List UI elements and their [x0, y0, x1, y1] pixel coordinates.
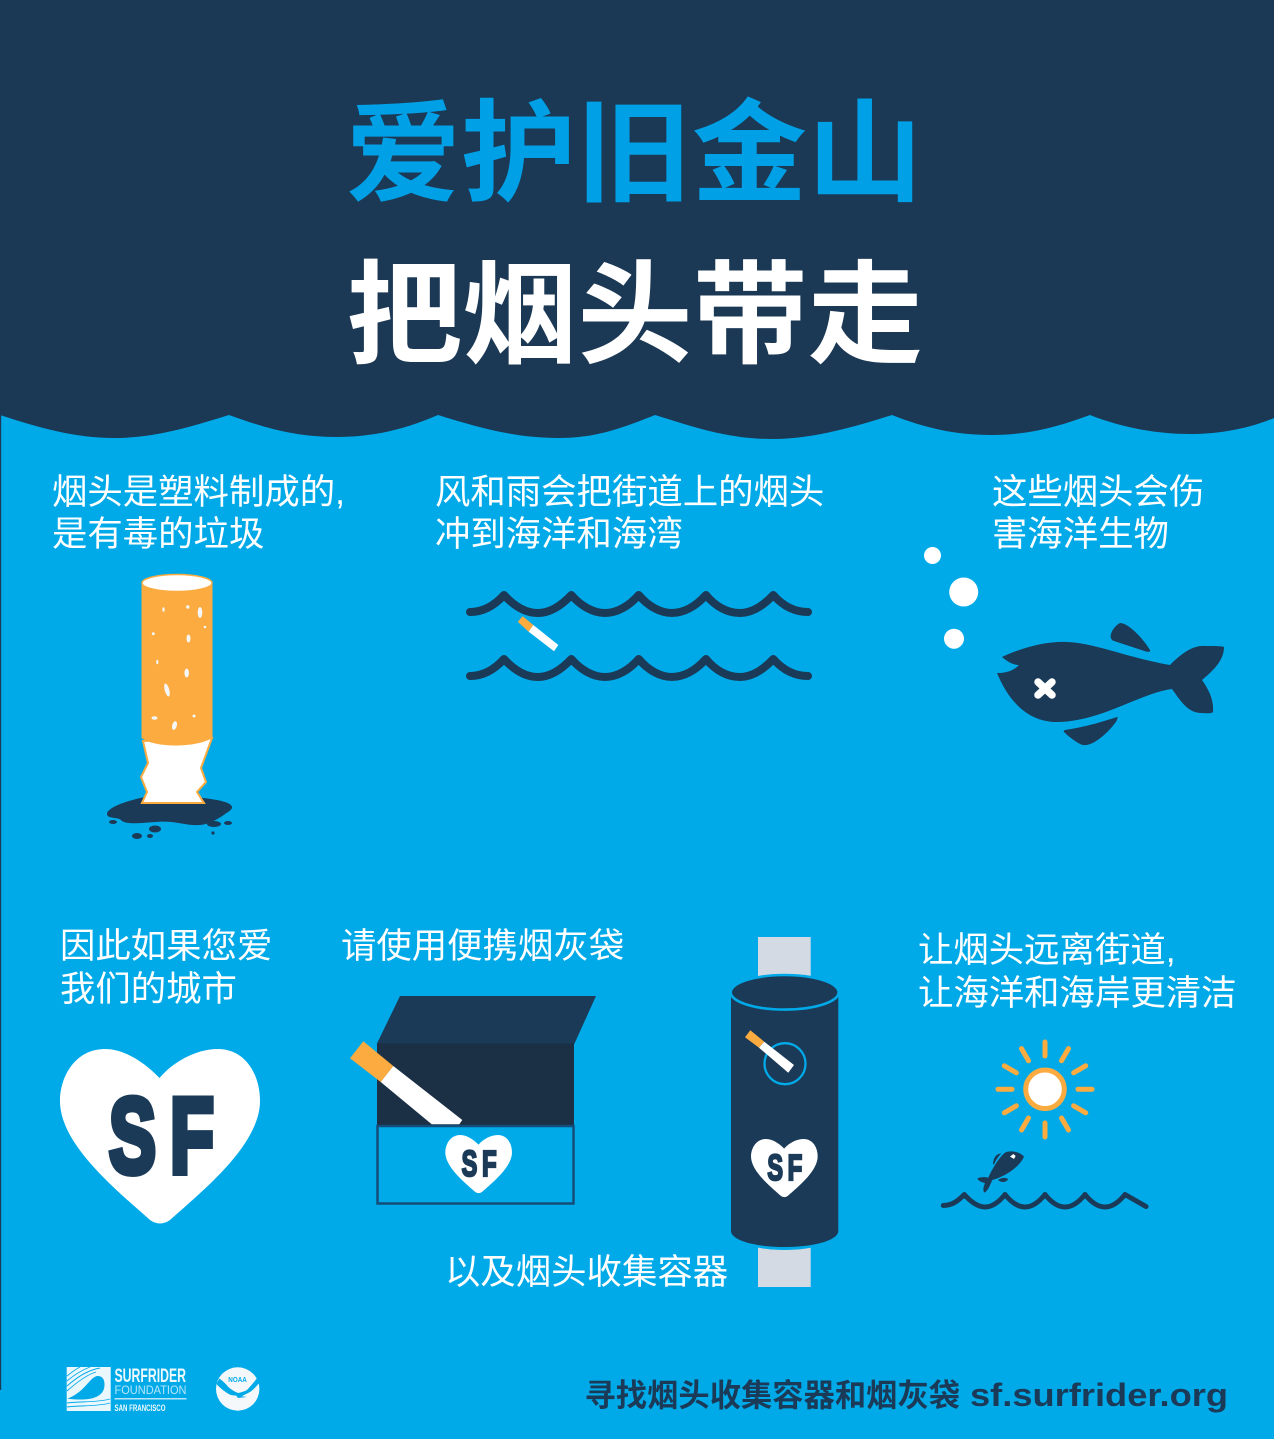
cigarette [350, 1041, 462, 1124]
text: wind and rain: 风和雨会把街道上的烟头 [435, 472, 824, 512]
text: cleaner streets and coast: 让海洋和海岸更清洁 [918, 973, 1237, 1013]
pole top [758, 937, 811, 977]
icon: pocket ashtray pouch [350, 996, 596, 1204]
text: harm marine life: 这些烟头会伤 [992, 472, 1204, 512]
pouch lid [377, 996, 596, 1044]
title: 把烟头带走: 把烟头带走 [347, 254, 923, 379]
icon: cigarette butt [107, 574, 232, 839]
SF lettering: F [170, 1076, 214, 1196]
small SF heart: F [788, 1148, 802, 1188]
small SF heart: S [767, 1148, 783, 1188]
text: if you love the city: 因此如果您爱 [60, 926, 272, 966]
text: harm marine life: 害海洋生物 [992, 514, 1169, 554]
fish x eye [1038, 682, 1052, 695]
small SF heart [445, 1135, 512, 1193]
lower wave [470, 659, 808, 677]
text: cleaner streets and coast: 让烟头远离街道, [918, 930, 1176, 970]
heart shape [60, 1049, 260, 1224]
footer web address: sf.surfrider.org [970, 1377, 1228, 1413]
sun disc [1026, 1070, 1064, 1109]
icon: SF heart [60, 1049, 260, 1224]
small SF heart [751, 1139, 818, 1197]
small wave [943, 1194, 1146, 1207]
sun rays [998, 1042, 1092, 1137]
footer Chinese text: 寻找烟头收集容器和烟灰袋 [584, 1378, 960, 1413]
opening ring [764, 1043, 806, 1084]
logo: Surfrider Foundation [67, 1366, 186, 1413]
receptacle body [731, 992, 838, 1247]
logo swoosh [67, 1376, 105, 1400]
text: wind and rain: 冲到海洋和海湾 [435, 514, 683, 554]
SURFRIDER wordmark: SURFRIDER [114, 1366, 186, 1387]
header wave band [0, 0, 1274, 439]
text: plastic toxic waste: 是有毒的垃圾 [52, 514, 264, 554]
upper wave [470, 595, 808, 613]
ash puddle [107, 796, 232, 825]
receptacle top [731, 975, 839, 1010]
pouch front [378, 1126, 574, 1204]
SF lettering: S [109, 1076, 156, 1196]
fish dorsal fin [1111, 623, 1150, 652]
floating cigarette [518, 616, 558, 651]
icon: sun and jumping fish [943, 1042, 1146, 1207]
NOAA bird band [216, 1378, 259, 1398]
filter top [142, 574, 212, 592]
bubbles [924, 547, 978, 649]
SF lettering [109, 1076, 214, 1196]
icon: dead fish with bubbles [924, 547, 1224, 745]
fish body [997, 642, 1224, 722]
NOAA disc [216, 1367, 259, 1411]
logo: NOAA [216, 1367, 259, 1411]
fish ventral fin [1064, 717, 1118, 745]
text: if you love the city: 我们的城市 [60, 969, 237, 1009]
pole bottom [758, 1247, 811, 1287]
text: and butt receptacles: 以及烟头收集容器 [445, 1252, 728, 1292]
icon: waves with cigarette [470, 595, 808, 677]
SAN FRANCISCO wordmark: SAN FRANCISCO [114, 1403, 166, 1413]
receptacle base rim [731, 1215, 838, 1250]
small SF heart: S [462, 1144, 477, 1184]
FOUNDATION wordmark: FOUNDATION [114, 1385, 186, 1397]
logo wave lines [67, 1367, 110, 1407]
tobacco flecks [152, 605, 206, 730]
filter paper [141, 738, 212, 803]
small SF heart: F [482, 1144, 497, 1184]
logo square [67, 1367, 111, 1411]
pouch interior [377, 1044, 574, 1126]
text: pocket ashtray: 请使用便携烟灰袋 [341, 926, 624, 966]
footer call to action [584, 1377, 1228, 1413]
text: plastic toxic waste: 烟头是塑料制成的, [52, 472, 345, 512]
ash specks [109, 820, 232, 839]
NOAA wordmark: NOAA [228, 1377, 247, 1384]
icon: butt receptacle on pole [731, 937, 839, 1287]
title: 爱护旧金山: 爱护旧金山 [346, 92, 922, 216]
orange filter [142, 583, 212, 746]
cigarette [745, 1030, 794, 1073]
jumping fish [977, 1151, 1024, 1193]
